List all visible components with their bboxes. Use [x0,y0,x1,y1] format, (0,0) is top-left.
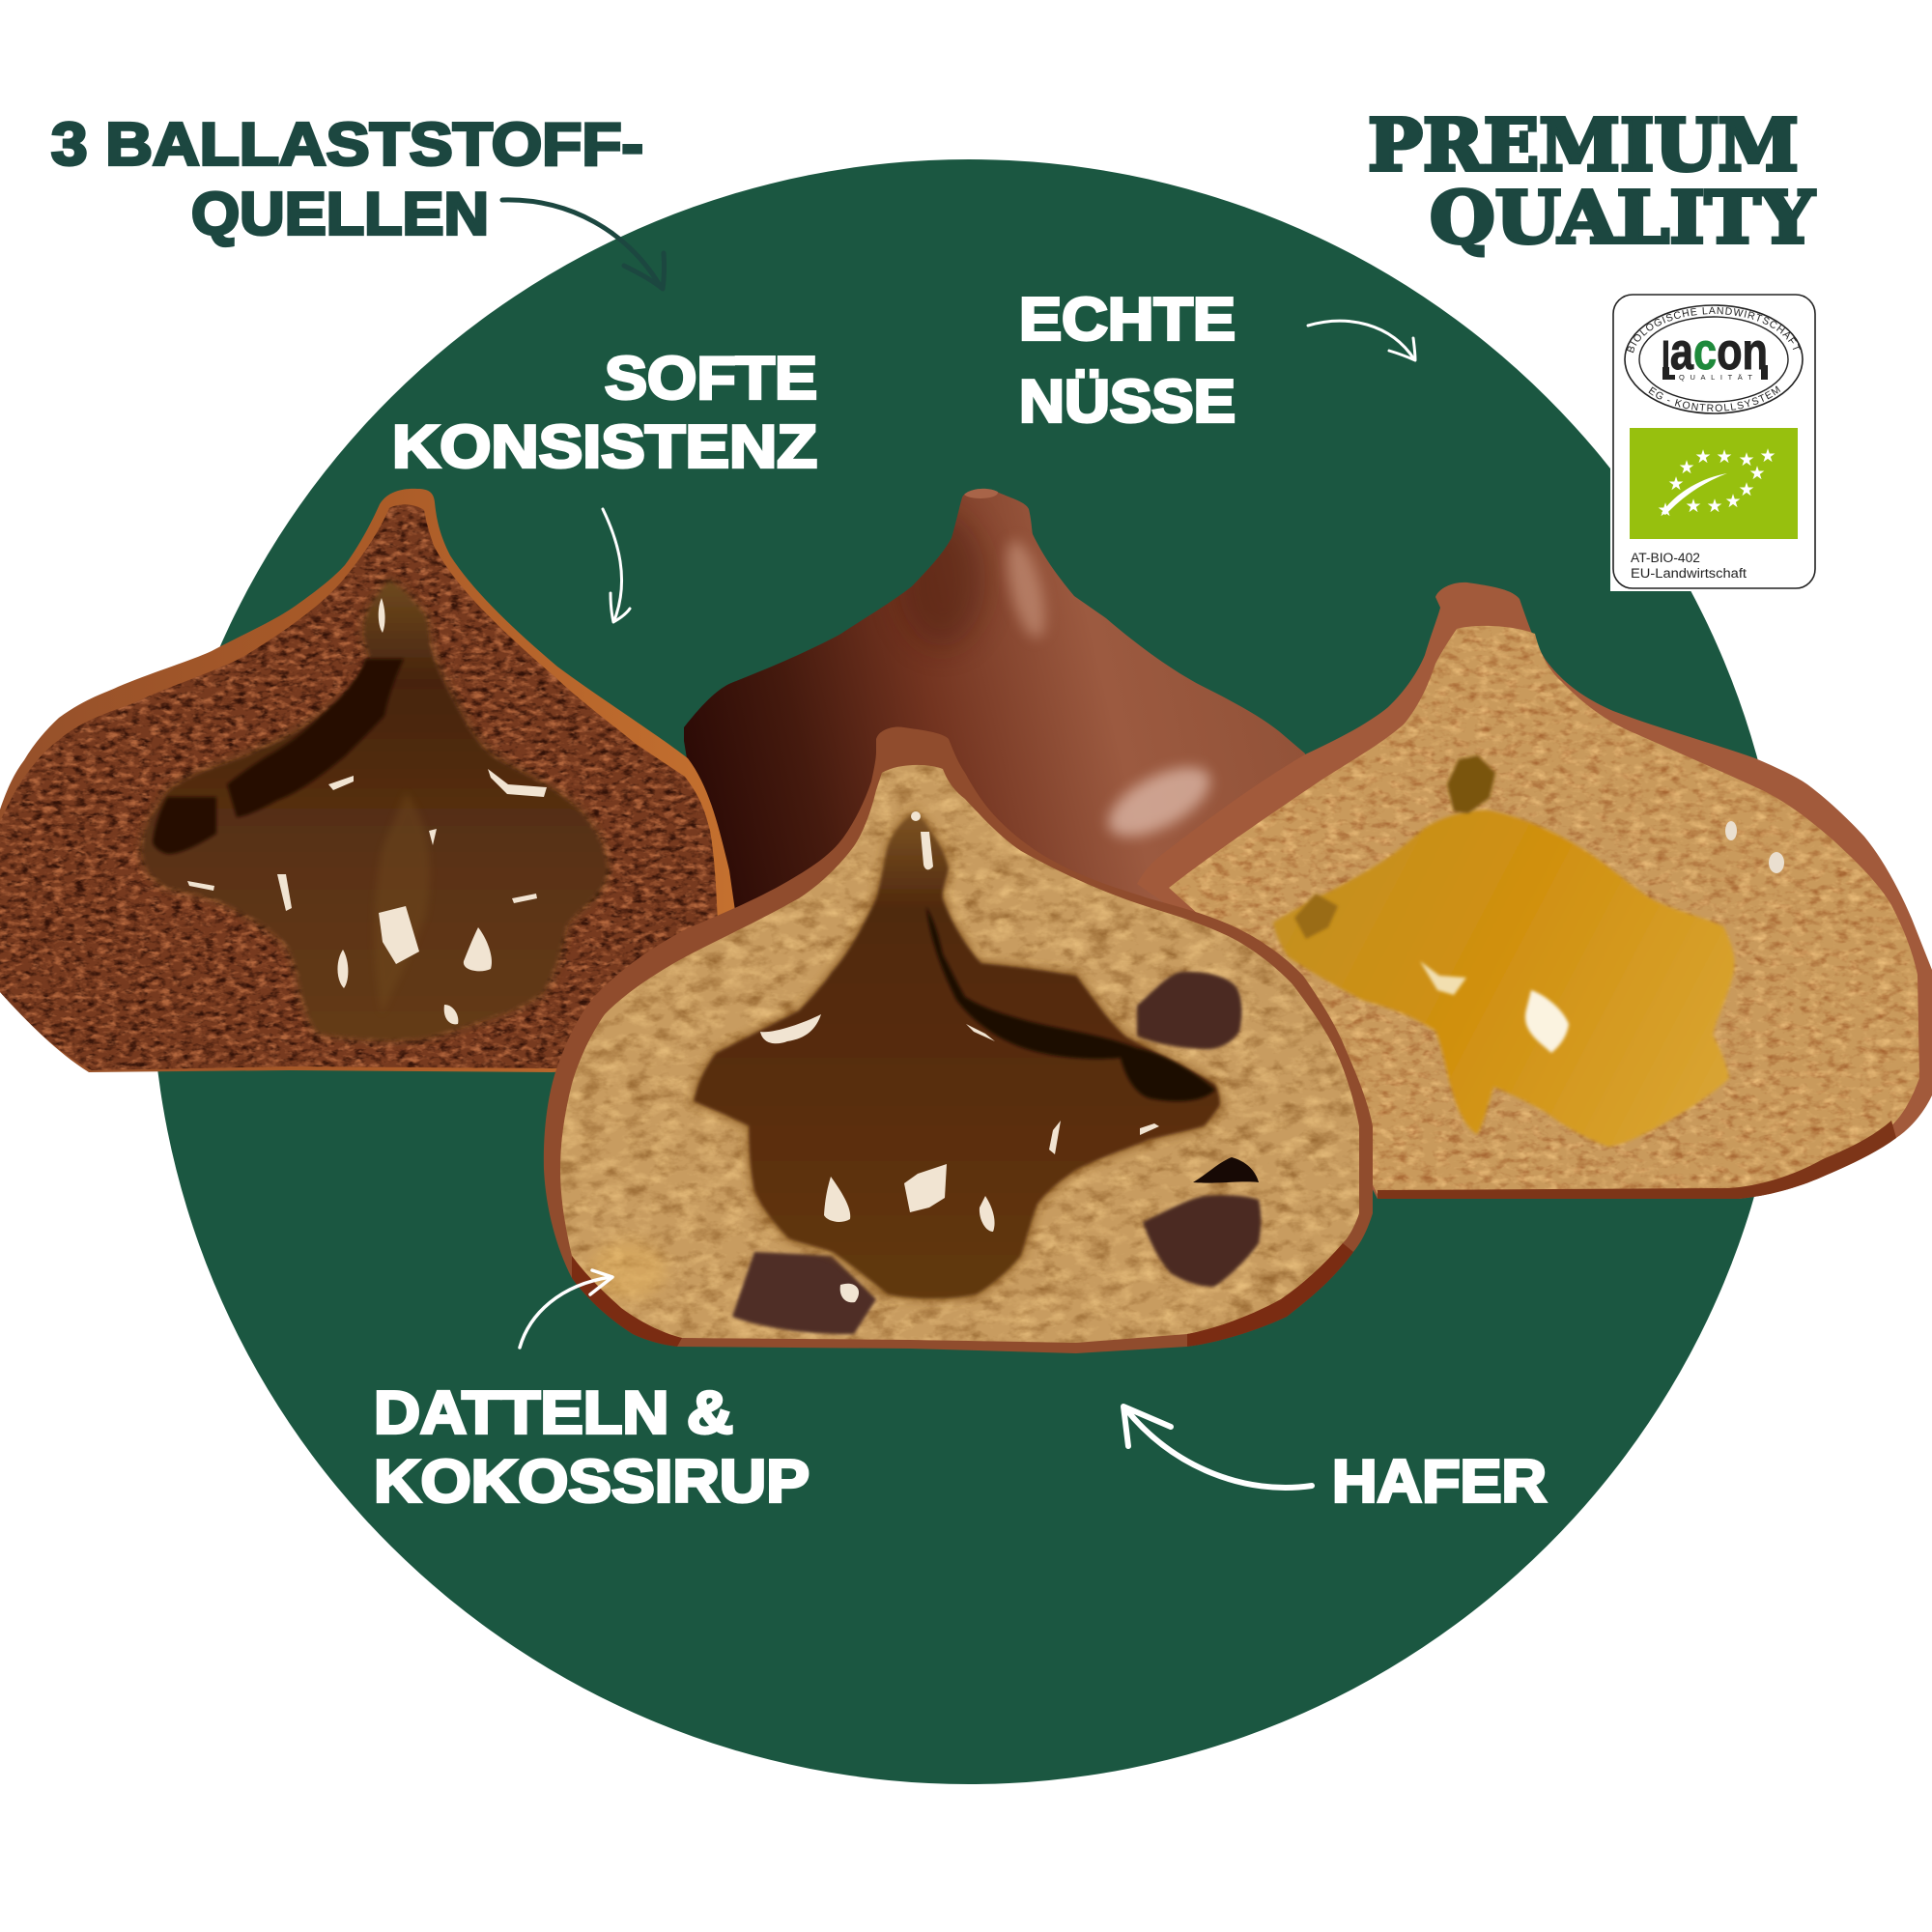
lacon oval seal: lacon [1662,323,1768,381]
crumb [1169,626,1919,1194]
certification code: EU-Landwirtschaft [1631,566,1747,581]
arrow: Echte Nüsse [1308,321,1415,360]
EU organic leaf logo [1630,428,1798,539]
label: Hafer: HAFER [1332,1449,1547,1515]
heading: 3 Ballaststoff-Quellen [51,112,643,247]
background circle [152,159,1786,1784]
crumb [0,504,720,1070]
EU organic leaf logo: ★ [1759,445,1776,467]
heading: 3 Ballaststoff-Quellen: QUELLEN [191,182,489,247]
arrow: Datteln & Kokossirup [520,1270,612,1348]
highlights and shadow [898,487,1220,850]
caramel filling [694,811,1220,1298]
chocolate shell [1137,582,1932,1199]
certification code [1631,551,1747,581]
EU organic leaf logo: ★ [1694,446,1712,468]
label: Softe Konsistenz [392,346,817,481]
lacon oval seal [1624,304,1804,414]
red-brown lower edge [572,1243,1353,1347]
filling halo [143,582,607,1039]
arrow: Softe Konsistenz [603,509,630,622]
filling halo [694,811,1220,1298]
label: Datteln & Kokossirup: DATTELN & [374,1379,733,1447]
soft caramel fold [375,792,430,1014]
dark filling cavity [153,659,404,854]
EU organic leaf logo: ★ [1667,473,1685,495]
pastry: front cut with chocolate chips [544,726,1373,1353]
arrow: Ballaststoff to circle [502,200,665,289]
EU organic leaf logo: ★ [1738,449,1755,470]
label: Datteln & Kokossirup: KOKOSSIRUP [374,1449,810,1515]
lacon oval seal: QUALITÄT [1679,373,1752,382]
caramel glints [187,598,547,1024]
EU organic leaf logo: ★ [1685,496,1702,517]
caramel glints [760,811,1159,1302]
heading: Premium Quality [1368,104,1815,260]
EU organic leaf logo: ★ [1706,496,1723,517]
caramel filling [143,582,607,1039]
white panel behind certification badge [1610,290,1819,591]
heading: Premium Quality: PREMIUM [1368,104,1799,187]
label: Echte Nüsse: NÜSSE [1019,369,1236,435]
label: Datteln & Kokossirup [374,1379,810,1515]
heading: Premium Quality: QUALITY [1430,177,1815,260]
badge frame [1613,295,1815,588]
coating body [684,489,1305,927]
pastry: back whole chocolate-coated [684,487,1305,927]
cavity near chip [1193,1157,1259,1183]
bottom crust shadow [1378,1121,1896,1199]
arrow: Hafer [1123,1406,1312,1488]
label: Softe Konsistenz: KONSISTENZ [392,413,817,481]
label: Echte Nüsse: ECHTE [1019,286,1236,354]
lacon oval seal: EG - KONTROLLSYSTEM [1648,385,1781,412]
golden filling [1273,810,1734,1147]
pastry: left cut chocolate dough [0,489,736,1072]
lighter crumb patch [589,1241,667,1299]
certification badge [1612,294,1816,589]
EU organic leaf logo: ★ [1748,463,1766,484]
lacon oval seal: BIOLOGISCHE LANDWIRTSCHAFT [1627,307,1801,354]
dark filling cavity [926,907,1215,1101]
EU organic leaf logo: ★ [1716,446,1733,468]
EU organic leaf logo: ★ [1657,499,1674,521]
EU organic leaf logo: ★ [1678,457,1695,478]
label: Echte Nüsse [1019,286,1236,435]
certification code: AT-BIO-402 [1631,551,1700,565]
EU organic leaf logo: ★ [1724,491,1742,512]
label: Softe Konsistenz: SOFTE [605,346,817,412]
chocolate shell [0,489,736,1072]
crumb [560,765,1359,1343]
chocolate shell [544,726,1373,1353]
filling shadows and glint [1294,755,1784,1053]
EU organic leaf logo: ★ [1738,479,1755,500]
chocolate chips [732,972,1261,1334]
pastry: right cut golden filling [1137,582,1932,1199]
heading: 3 Ballaststoff-Quellen: 3 BALLASTSTOFF- [51,112,643,178]
